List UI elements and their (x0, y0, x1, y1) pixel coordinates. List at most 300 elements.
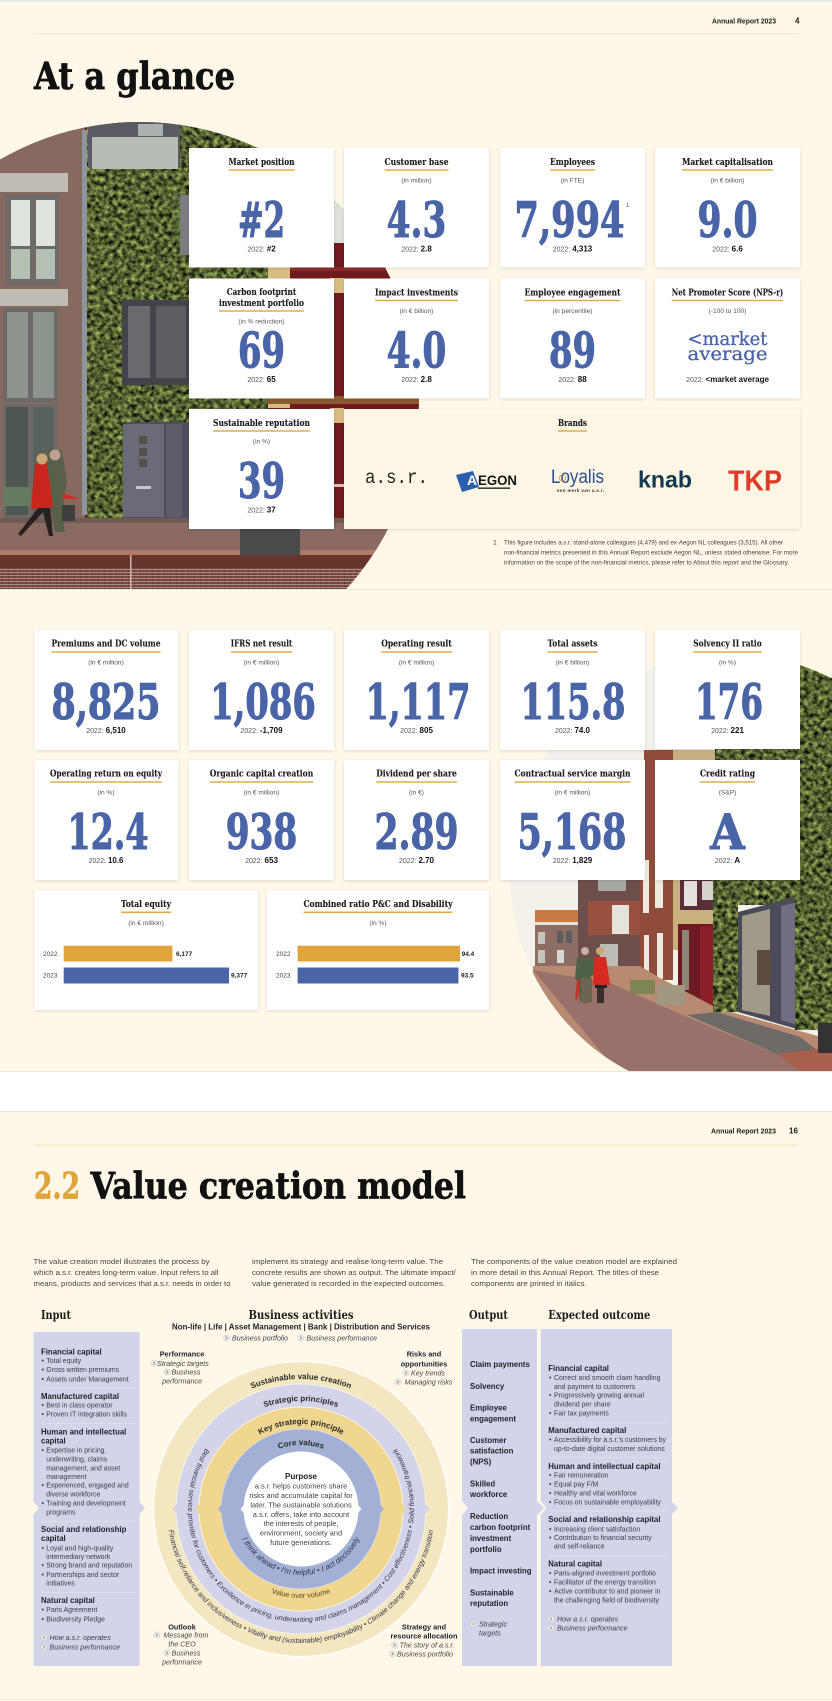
card: Customer base: (in million) (401, 178, 432, 184)
label: Outlook: Outlook (168, 1622, 197, 1631)
card: Dividend per share: 2022: 2.70 (399, 856, 435, 865)
block: financial capital: Correct and smooth claim handling (554, 1375, 661, 1382)
block: human and intellectual capital: Human and intellectual capital (548, 1462, 661, 1471)
card: Carbon footprint investment portfolio: (in % reduction) (238, 318, 285, 326)
card: IFRS net result (189, 630, 334, 750)
block: human and intellectual capital: programs (46, 1510, 76, 1516)
links: input references: Business performance (50, 1644, 120, 1652)
block: financial capital: dividend per share (554, 1402, 611, 1408)
panel: Output: Reduction (470, 1512, 508, 1521)
card: Sustainable reputation (189, 409, 334, 529)
label: Strategy and resource allocation: Strategy and (402, 1622, 446, 1631)
card: Solvency II ratio: (in %) (719, 660, 736, 666)
block: natural capital: Paris-aligned investment portfolio (554, 1570, 656, 1578)
page header: Annual Report 2023, page 4: Annual Report 2023 (712, 18, 776, 26)
label: Outlook: performance (161, 1659, 202, 1667)
card: Organic capital creation (189, 760, 334, 880)
panel: Output: Employee (470, 1404, 507, 1413)
block: social and relationship capital: Increasing client satisfaction (554, 1526, 640, 1533)
value: 1,086: 1,086 (210, 673, 316, 731)
links: input references: How a.s.r. operates (50, 1634, 111, 1642)
block: human and intellectual capital: management (46, 1474, 87, 1481)
card: Employees: 1 (626, 203, 630, 209)
card: Contractual service margin: (in € million) (555, 790, 590, 796)
block: human and intellectual capital: capital (41, 1436, 66, 1446)
intro text: value generated is recorded in the expected outcomes. (252, 1279, 445, 1288)
intro text: which a.s.r. creates long-term value. Input refers to all (32, 1268, 219, 1277)
text: Purpose: later. The sustainable solutions (250, 1500, 352, 1510)
block: financial capital: • (42, 1367, 44, 1374)
card: Carbon footprint investment portfolio: investment portfolio (219, 298, 304, 309)
card: Operating return on equity: 2022: 10.6 (88, 856, 124, 865)
upper window (88, 122, 180, 169)
ground: sidewalk, road and pavement (533, 966, 832, 1075)
value: market average: <market (688, 328, 768, 350)
block: human and intellectual capital: • (549, 1500, 552, 1506)
page header: Annual Report 2023, page 4: 4 (795, 16, 800, 26)
card: Market capitalisation: Market capitalisation (682, 157, 773, 168)
block: natural capital: Biodiversity Pledge (46, 1616, 105, 1624)
block: social and relationship capital: Contribution to financial security (554, 1535, 652, 1542)
panel: Output: (NPS) (470, 1458, 492, 1467)
links: outcome references: Business performance (557, 1625, 628, 1633)
value: 9.0: 9.0 (698, 191, 758, 249)
panel: Output: workforce (469, 1490, 508, 1499)
block: human and intellectual capital: diverse workforce (46, 1492, 100, 1498)
logo: Aegon: A (467, 472, 477, 488)
block: human and intellectual capital: Healthy and vital workforce (554, 1490, 637, 1498)
value: 89: 89 (549, 322, 596, 380)
block: social and relationship capital: • (42, 1562, 44, 1570)
block: manufactured capital: Accessibility for a.s.r.'s customers by (554, 1437, 667, 1444)
bench (3, 487, 31, 506)
panel: Output: portfolio (470, 1545, 502, 1554)
bar: 2022: 94.4 (462, 951, 475, 958)
card: Premiums and DC volume: Premiums and DC volume (52, 639, 160, 650)
value: 4.3: 4.3 (387, 191, 446, 249)
card: Impact investments: Impact investments (375, 288, 458, 298)
panel: Output: Output (469, 1307, 508, 1322)
bar: 2023: 2023 (43, 972, 58, 980)
photo: street with couple and green wall (500, 650, 832, 1075)
value: 39: 39 (238, 452, 285, 510)
page header: Annual Report 2023, page 16: Annual Report 2023 (711, 1128, 776, 1136)
block: manufactured capital (548, 1426, 667, 1453)
card: Carbon footprint investment portfolio: 2022: 65 (247, 375, 276, 384)
intro text (32, 1257, 677, 1288)
card: Market capitalisation: (in € billion) (711, 178, 744, 184)
block: human and intellectual capital: underwriting, claims (46, 1456, 108, 1464)
value: A: A (709, 803, 746, 861)
block: human and intellectual capital: Expertise in pricing, (46, 1448, 107, 1454)
footnote 1: 1 (493, 540, 497, 546)
block: social and relationship capital: • (42, 1546, 44, 1552)
title: 2.2 Value creation model: 2.2 (34, 1164, 80, 1208)
card: Customer base: 2022: 2.8 (401, 244, 432, 254)
panel: Output: Impact investing (470, 1566, 532, 1576)
block: human and intellectual capital (548, 1462, 661, 1506)
value: 176: 176 (695, 673, 763, 731)
card: Carbon footprint investment portfolio: Carbon footprint (227, 287, 297, 298)
footnote 1: information on the scope of the non-financial metrics, please refer to About this report and the Glossary. (504, 560, 789, 566)
card: Premiums and DC volume (34, 630, 178, 750)
label: Risks and opportunities (395, 1350, 453, 1387)
text: Purpose: Purpose (285, 1472, 318, 1481)
card: Net Promoter Score: (-100 to 100) (709, 308, 746, 315)
block: financial capital: Assets under Management (46, 1376, 129, 1383)
card: Solvency II ratio: 2022: 221 (711, 726, 744, 735)
block: natural capital: • (42, 1616, 44, 1624)
label: Risks and opportunities: Key trends (411, 1370, 445, 1378)
block: natural capital: Active contributor to and pioneer in (554, 1588, 661, 1595)
heading: Business activities (172, 1307, 431, 1343)
value: 8,825: 8,825 (52, 673, 160, 731)
bar: 2023 (43, 968, 248, 984)
card: Dividend per share (344, 760, 489, 880)
block: manufactured capital: Proven IT integration skills (46, 1412, 128, 1418)
value: 938: 938 (226, 803, 297, 861)
label: Performance: Strategic targets (157, 1360, 209, 1368)
card: Market position: 2022: #2 (247, 244, 276, 254)
ring label: core values list: I think ahead • I'm helpful • I act decisively (242, 1536, 360, 1577)
people: couple walking (575, 947, 610, 1003)
card: Dividend per share: Dividend per share (376, 769, 457, 780)
card: Impact investments (344, 278, 489, 398)
label: Strategy and resource allocation: Business portfolio (397, 1651, 453, 1659)
block: human and intellectual capital: Human and intellectual (41, 1427, 126, 1436)
label: Performance (151, 1350, 209, 1386)
bar: 2023: 9,377 (231, 972, 248, 980)
value: market average: average (688, 343, 768, 365)
logo: a.s.r.: a.s.r. (365, 467, 428, 489)
card: Premiums and DC volume: 2022: 6,510 (86, 726, 126, 735)
card: Market capitalisation: 2022: 6.6 (712, 244, 743, 254)
block: social and relationship capital: intermediary network (46, 1554, 111, 1561)
card: Credit rating: Credit rating (700, 769, 755, 780)
card: Customer base: Customer base (384, 157, 448, 168)
block: social and relationship capital: initiatives (46, 1580, 75, 1588)
block: financial capital: Progressively growing annual (554, 1393, 644, 1400)
logo: Aegon (456, 471, 517, 492)
ring label: Strategic principles: Strategic principles (264, 1396, 338, 1407)
block: social and relationship capital: capital (41, 1534, 66, 1543)
block: financial capital: Financial capital (41, 1347, 102, 1356)
block: natural capital: • (549, 1588, 552, 1595)
card: Employees: Employees (550, 157, 595, 168)
block: human and intellectual capital: Fair remuneration (554, 1473, 609, 1480)
intro text: implement its strategy and realise long-term value. The (252, 1257, 443, 1266)
card: Sustainable reputation: Sustainable reputation (213, 418, 310, 429)
heading: Business activities: Business portfolio (232, 1335, 288, 1343)
value: 5,168: 5,168 (518, 803, 626, 861)
text: Purpose (249, 1472, 353, 1547)
card: Sustainable reputation: 2022: 37 (247, 506, 276, 514)
panel: Output: Solvency (470, 1382, 505, 1391)
block: financial capital: • (42, 1376, 44, 1383)
card: Net Promoter Score (655, 278, 800, 398)
card: Operating result: 2022: 805 (400, 726, 433, 735)
block: financial capital: • (549, 1375, 552, 1382)
panel: Output: Skilled (470, 1480, 495, 1488)
chart card: Combined ratio (267, 890, 489, 1010)
block: financial capital: • (549, 1393, 552, 1400)
block: human and intellectual capital: Focus on sustainable employability (554, 1500, 661, 1506)
block: manufactured capital: • (42, 1402, 44, 1410)
label: Outlook: Message from (164, 1632, 209, 1640)
panel: Output: Claim payments (470, 1360, 530, 1369)
bar: 2023: 2023 (276, 972, 291, 980)
ring label: sustainable value creation list: Financial self-reliance and inclusiveness • Vitality and (sustainable) employability • Climate change and energy transition (168, 1530, 434, 1644)
block: human and intellectual capital: Experienced, engaged and (46, 1483, 129, 1490)
chart card: Combined ratio: (in %) (369, 920, 387, 927)
card: Employees (500, 148, 645, 268)
block: social and relationship capital: • (549, 1535, 552, 1542)
block: manufactured capital (41, 1392, 128, 1418)
white gap between pages (0, 1071, 832, 1112)
value: market average (688, 328, 768, 365)
bar: 2022: 2022 (43, 951, 58, 958)
page header: Annual Report 2023, page 16: 16 (789, 1126, 798, 1136)
panel: Output: Strategic (479, 1620, 507, 1628)
block: social and relationship capital (548, 1515, 661, 1551)
bar: 2023 (276, 968, 474, 984)
card: Total assets: Total assets (548, 639, 598, 650)
intro text: components are printed in italics. (471, 1279, 587, 1288)
panel: Expected outcome (541, 1307, 678, 1666)
block: social and relationship capital: Partnerships and sector (46, 1572, 120, 1579)
block: natural capital (41, 1596, 105, 1624)
bench and plants (657, 985, 685, 1005)
ring label: Value over volume: Value over volume (272, 1588, 330, 1598)
label: Risks and opportunities: Risks and (407, 1350, 441, 1358)
card: Credit rating (655, 760, 800, 880)
intro text: The components of the value creation model are explained (471, 1257, 677, 1266)
label: Performance: Performance (160, 1350, 204, 1358)
footnote 1 (493, 540, 798, 566)
card: Credit rating: 2022: A (715, 856, 740, 865)
card: Operating return on equity: Operating return on equity (50, 769, 162, 780)
block: financial capital: Gross written premiums (46, 1367, 120, 1374)
card: Total assets: 2022: 74.0 (555, 726, 591, 735)
label: Risks and opportunities: opportunities (401, 1360, 447, 1368)
block: financial capital: and payment to customers (554, 1384, 636, 1391)
card: Credit rating: (S&P) (719, 790, 736, 796)
block: financial capital: • (549, 1410, 552, 1418)
card: Operating result: (in € million) (399, 660, 434, 666)
intro text: means, products and services that a.s.r. needs in order to (34, 1279, 231, 1288)
text: Purpose: risks and accumulate capital for (249, 1491, 353, 1500)
block: human and intellectual capital: • (42, 1448, 44, 1454)
block: social and relationship capital: and self-reliance (554, 1544, 605, 1551)
card: Organic capital creation: (in € million) (244, 790, 279, 796)
bar: 2022: 2022 (276, 951, 291, 958)
card: IFRS net result: IFRS net result (231, 639, 293, 650)
block: natural capital: • (42, 1607, 44, 1614)
title: At a glance: At a glance (33, 54, 235, 98)
card: Total assets: (in € billion) (556, 660, 589, 666)
logo: knab: knab (638, 466, 692, 492)
card: Solvency II ratio (655, 630, 800, 749)
intro text: concrete results are shown as output. The ultimate impact/ (252, 1268, 457, 1277)
value: 7,994: 7,994 (514, 191, 624, 249)
block: financial capital: Total equity (46, 1358, 82, 1365)
card: Dividend per share: (in €) (409, 790, 424, 796)
page header: Annual Report 2023, page 16 (34, 1126, 798, 1145)
panel: Output: satisfaction (470, 1446, 514, 1456)
block: natural capital: the challenging field of biodiversity (554, 1598, 660, 1605)
title: 2.2 Value creation model: Value creation model (90, 1164, 466, 1208)
footnote 1: This figure includes a.s.r. stand-alone colleagues (4,479) and ex-Aegon NL colleagues (3,515). All other (504, 540, 784, 546)
card: Operating result (344, 630, 489, 750)
block: social and relationship capital: Social and relationship (41, 1525, 127, 1534)
panel: Input: Input (41, 1307, 71, 1322)
people: couple walking (18, 450, 81, 536)
panel: Output: investment (470, 1534, 512, 1543)
text: Purpose: environment, society and (260, 1528, 342, 1538)
heading: Business activities: Non-life | Life | Asset Management | Bank | Distribution and Services (172, 1322, 431, 1332)
card: Operating result: Operating result (381, 639, 452, 650)
ring label: strategic principles list: Best financial service provider for customers • Excellence in pricing, underwriting and claims management • Cost effectiveness • Solid financial framework (186, 1448, 414, 1624)
intro text: The value creation model illustrates the process by (34, 1257, 210, 1266)
page header: Annual Report 2023, page 4 (34, 16, 800, 34)
card: Employee engagement: (in percentile) (553, 308, 592, 315)
card: Employee engagement (500, 278, 645, 398)
panel: Brands (344, 409, 800, 529)
panel: Output: engagement (470, 1414, 516, 1423)
chart card: Total equity (34, 890, 258, 1010)
card: Market position: Market position (228, 157, 295, 168)
logo: Aegon: EGON (478, 472, 517, 488)
footnote 1: non-financial metrics presented in this Annual Report exclude Aegon NL, unless stated otherwise. For more (504, 550, 798, 556)
links: input references (41, 1634, 120, 1652)
pavement and brick wall (0, 518, 344, 523)
chart card: Total equity: (in € million) (128, 920, 164, 927)
card: Employee engagement: Employee engagement (524, 288, 621, 298)
card: Impact investments: (in € billion) (400, 308, 433, 315)
card: Organic capital creation: 2022: 653 (245, 856, 278, 865)
value: 69: 69 (238, 322, 285, 380)
panel: Expected outcome: Expected outcome (548, 1307, 650, 1322)
bar: 2022: 6,177 (176, 951, 193, 958)
card: Carbon footprint investment portfolio (189, 278, 334, 398)
card: Impact investments: 2022: 2.8 (401, 375, 432, 384)
block: financial capital (41, 1347, 129, 1383)
value: 1,117: 1,117 (366, 673, 470, 731)
links: outcome references: How a.s.r. operates (557, 1616, 619, 1624)
card: Operating return on equity: (in %) (97, 790, 115, 796)
ring label: Core values: Core values (278, 1440, 324, 1448)
block: human and intellectual capital (41, 1427, 129, 1516)
block: social and relationship capital: • (549, 1526, 552, 1533)
label: Performance: performance (161, 1378, 202, 1386)
block: social and relationship capital: • (42, 1572, 44, 1579)
logo: TKP: TKP (728, 466, 782, 498)
block: manufactured capital: up-to-date digital customer solutions (554, 1446, 665, 1453)
heading: Business activities: Business activities (248, 1307, 354, 1322)
block: natural capital: Natural capital (548, 1560, 602, 1568)
label: Strategy and resource allocation (389, 1622, 457, 1659)
card: Operating return on equity (34, 760, 178, 880)
photo: green-wall building with couple walking (0, 100, 430, 600)
card: Premiums and DC volume: (in € million) (88, 660, 124, 666)
panel: Brands: Brands (558, 418, 587, 429)
panel: Output (462, 1307, 544, 1666)
links: outcome references (548, 1616, 628, 1633)
block: human and intellectual capital: • (42, 1483, 44, 1490)
block: human and intellectual capital: management, and asset (46, 1466, 120, 1472)
logo: Loyalis: Loyalis (551, 467, 604, 488)
card: Contractual service margin: 2022: 1,829 (553, 856, 593, 865)
text: Purpose: a.s.r. offers, take into account (253, 1510, 349, 1519)
panel: Input (34, 1307, 145, 1666)
block: natural capital (548, 1560, 661, 1605)
intro text: in more detail in this Annual Report. The titles of these (471, 1268, 659, 1277)
card: Contractual service margin: Contractual service margin (514, 769, 631, 780)
logo: Loyalis: een merk van a.s.r. (557, 488, 604, 493)
panel: Output: carbon footprint (470, 1523, 531, 1532)
block: human and intellectual capital: • (42, 1500, 44, 1508)
block: human and intellectual capital: Equal pay F/M (554, 1482, 599, 1489)
block: human and intellectual capital: • (549, 1473, 552, 1480)
block: social and relationship capital (41, 1525, 132, 1588)
block: human and intellectual capital: • (549, 1490, 552, 1498)
block: financial capital: Fair tax payments (554, 1410, 609, 1418)
label: Outlook: Business (172, 1650, 201, 1658)
block: natural capital: • (549, 1580, 552, 1586)
value: 4.0: 4.0 (387, 322, 446, 380)
glass door (738, 896, 800, 1030)
block: manufactured capital: Manufactured capital (548, 1426, 626, 1435)
block: human and intellectual capital: Training and development (46, 1500, 126, 1508)
card: IFRS net result: (in € million) (244, 660, 279, 666)
label: Strategy and resource allocation: resource allocation (391, 1632, 457, 1641)
panel: Output: Sustainable (470, 1588, 514, 1597)
foliage (713, 655, 832, 1035)
block: financial capital (548, 1364, 661, 1418)
value: 2.89: 2.89 (374, 803, 458, 861)
label: Outlook (154, 1622, 209, 1667)
label: Outlook: the CEO (168, 1641, 196, 1649)
card: Sustainable reputation: (in %) (253, 438, 270, 446)
label: Performance: Business (172, 1369, 201, 1377)
card: Net Promoter Score: 2022: <market average (686, 375, 769, 384)
diagram: concentric value creation rings (153, 1361, 449, 1657)
bar: 2022 (43, 946, 193, 962)
card: Employee engagement: 2022: 88 (558, 375, 587, 384)
card: Contractual service margin (500, 760, 645, 880)
card: Customer base (344, 148, 489, 268)
heading: Business activities: Business performance (306, 1335, 377, 1343)
bar: 2022 (276, 946, 475, 962)
panel: Output: reputation (470, 1599, 508, 1608)
card: Solvency II ratio: Solvency II ratio (693, 639, 762, 650)
card: Employees: 2022: 4,313 (553, 244, 593, 254)
chart card: Combined ratio: Combined ratio P&C and Disability (304, 899, 453, 910)
green wall foliage (87, 118, 268, 523)
value: #2: #2 (238, 191, 285, 249)
card: Employees: (in FTE) (561, 178, 584, 184)
ring label: Key strategic principle: Key strategic principle (258, 1418, 344, 1434)
card: Total assets (500, 630, 645, 750)
value: 12.4: 12.4 (68, 803, 148, 861)
block: natural capital: Paris Agreement (46, 1607, 97, 1614)
block: natural capital: Natural capital (41, 1596, 95, 1605)
block: manufactured capital: • (549, 1437, 552, 1444)
block: manufactured capital: • (42, 1412, 44, 1418)
card: Organic capital creation: Organic capital creation (210, 769, 313, 780)
card: Market position (189, 148, 334, 268)
block: natural capital: Facilitator of the energy transition (554, 1580, 656, 1586)
